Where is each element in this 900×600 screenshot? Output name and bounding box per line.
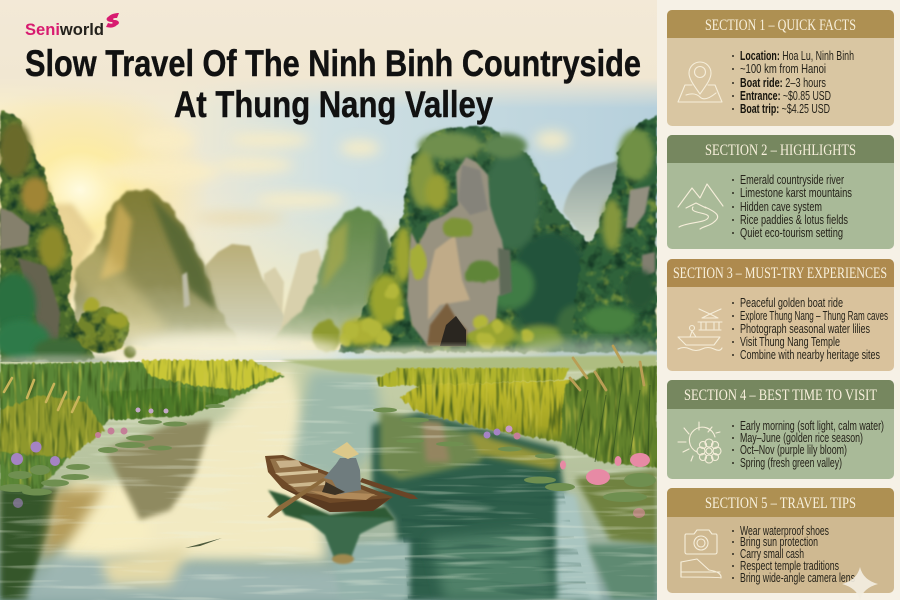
left bank of rice and reeds bbox=[0, 360, 284, 490]
sparkle decoration bbox=[842, 567, 878, 600]
list: travel tips: Wear waterproof shoes bbox=[740, 524, 829, 538]
seated farmer bbox=[324, 458, 361, 494]
lily pads and flowers bbox=[0, 404, 656, 518]
boat reflection bbox=[268, 490, 395, 564]
list: travel tips: Carry small cash bbox=[740, 547, 804, 561]
icon: mountains and river bbox=[678, 184, 723, 229]
list: quick facts: Entrance: ~$0.85 USD bbox=[740, 89, 831, 103]
list: best time: Spring (fresh green valley) bbox=[740, 456, 842, 470]
large karst mountain with cave bbox=[337, 125, 600, 352]
list: quick facts: Boat trip: ~$4.25 USD bbox=[740, 102, 830, 116]
header: section 2 bbox=[667, 135, 894, 163]
list: highlights: Quiet eco-tourism setting bbox=[740, 226, 843, 240]
header: section 5: SECTION 5 – TRAVEL TIPS bbox=[705, 495, 856, 512]
near oar bbox=[267, 478, 326, 518]
header: section 1: SECTION 1 – QUICK FACTS bbox=[705, 17, 856, 34]
painting: Ninh Binh valley with river and boat bbox=[0, 0, 660, 600]
list: travel tips: Bring sun protection bbox=[740, 535, 818, 549]
title: At Thung Nang Valley bbox=[174, 84, 493, 125]
list: experiences: Peaceful golden boat ride bbox=[740, 296, 843, 310]
wooden boat with farmer in conical hat bbox=[265, 442, 418, 518]
list: quick facts: Boat ride: 2–3 hours bbox=[740, 76, 826, 90]
right bank of rice and reeds bbox=[280, 346, 657, 468]
cave bbox=[427, 303, 467, 346]
header: section 1 bbox=[667, 10, 894, 38]
list: highlights bbox=[732, 173, 852, 240]
river water bbox=[0, 362, 657, 600]
far oar bbox=[360, 478, 418, 499]
list: experiences: Visit Thung Nang Temple bbox=[740, 335, 840, 349]
hull bbox=[265, 455, 393, 512]
logo: Seniworld: Seniworld bbox=[25, 20, 104, 39]
list: highlights: Limestone karst mountains bbox=[740, 186, 852, 200]
icon: map pin bbox=[678, 62, 722, 102]
header: section 2: SECTION 2 – HIGHLIGHTS bbox=[705, 142, 856, 159]
right forested cliff bbox=[570, 115, 657, 352]
header: section 3 bbox=[667, 259, 894, 287]
list: quick facts bbox=[732, 49, 854, 116]
icon: camera and shoe bbox=[681, 530, 721, 578]
cream fade behind the title bbox=[0, 0, 657, 108]
rock face bbox=[407, 157, 510, 345]
logo: Seniworld bbox=[25, 13, 119, 39]
panel: section 5 travel tips bbox=[667, 488, 894, 593]
list: best time: Oct–Nov (purple lily bloom) bbox=[740, 443, 847, 457]
far distant peaks bbox=[263, 248, 322, 331]
hazy peak behind left mountain bbox=[55, 202, 96, 304]
panel: section 3 must-try experiences bbox=[667, 259, 894, 371]
panel: section 2 highlights bbox=[667, 135, 894, 249]
list: highlights: Hidden cave system bbox=[740, 200, 822, 214]
sunlit mountain bbox=[50, 191, 240, 345]
list: best time bbox=[732, 419, 884, 470]
list: highlights: Rice paddies & lotus fields bbox=[740, 213, 848, 227]
list: travel tips: Respect temple traditions bbox=[740, 559, 839, 573]
foliage clusters bbox=[338, 285, 534, 348]
list: quick facts: ~100 km from Hanoi bbox=[740, 62, 826, 76]
logo mark bbox=[106, 13, 119, 28]
title bbox=[25, 43, 641, 125]
list: travel tips bbox=[732, 524, 855, 585]
left cliff with trees bbox=[0, 112, 95, 362]
bamboo clumps bbox=[75, 299, 340, 358]
sky bbox=[0, 0, 657, 360]
list: experiences bbox=[732, 296, 888, 362]
list: quick facts: Location: Hoa Lu, Ninh Binh bbox=[740, 49, 854, 63]
header: section 4 bbox=[667, 380, 894, 409]
header: section 5 bbox=[667, 488, 894, 517]
conical hat bbox=[332, 442, 359, 459]
panel: section 1 quick facts bbox=[667, 10, 894, 126]
icon: sun and flower bbox=[678, 422, 721, 463]
green mountain bbox=[270, 207, 392, 345]
morning mist bbox=[0, 332, 660, 367]
title: Slow Travel Of The Ninh Binh Countryside bbox=[25, 43, 641, 84]
far hazy peak right bbox=[562, 160, 618, 242]
list: travel tips: Bring wide-angle camera lens bbox=[740, 571, 855, 585]
list: highlights: Emerald countryside river bbox=[740, 173, 844, 187]
hazy mountain centre-left bbox=[205, 244, 284, 345]
icon: temple and boat bbox=[678, 309, 722, 350]
panel: section 4 best time to visit bbox=[667, 380, 894, 479]
